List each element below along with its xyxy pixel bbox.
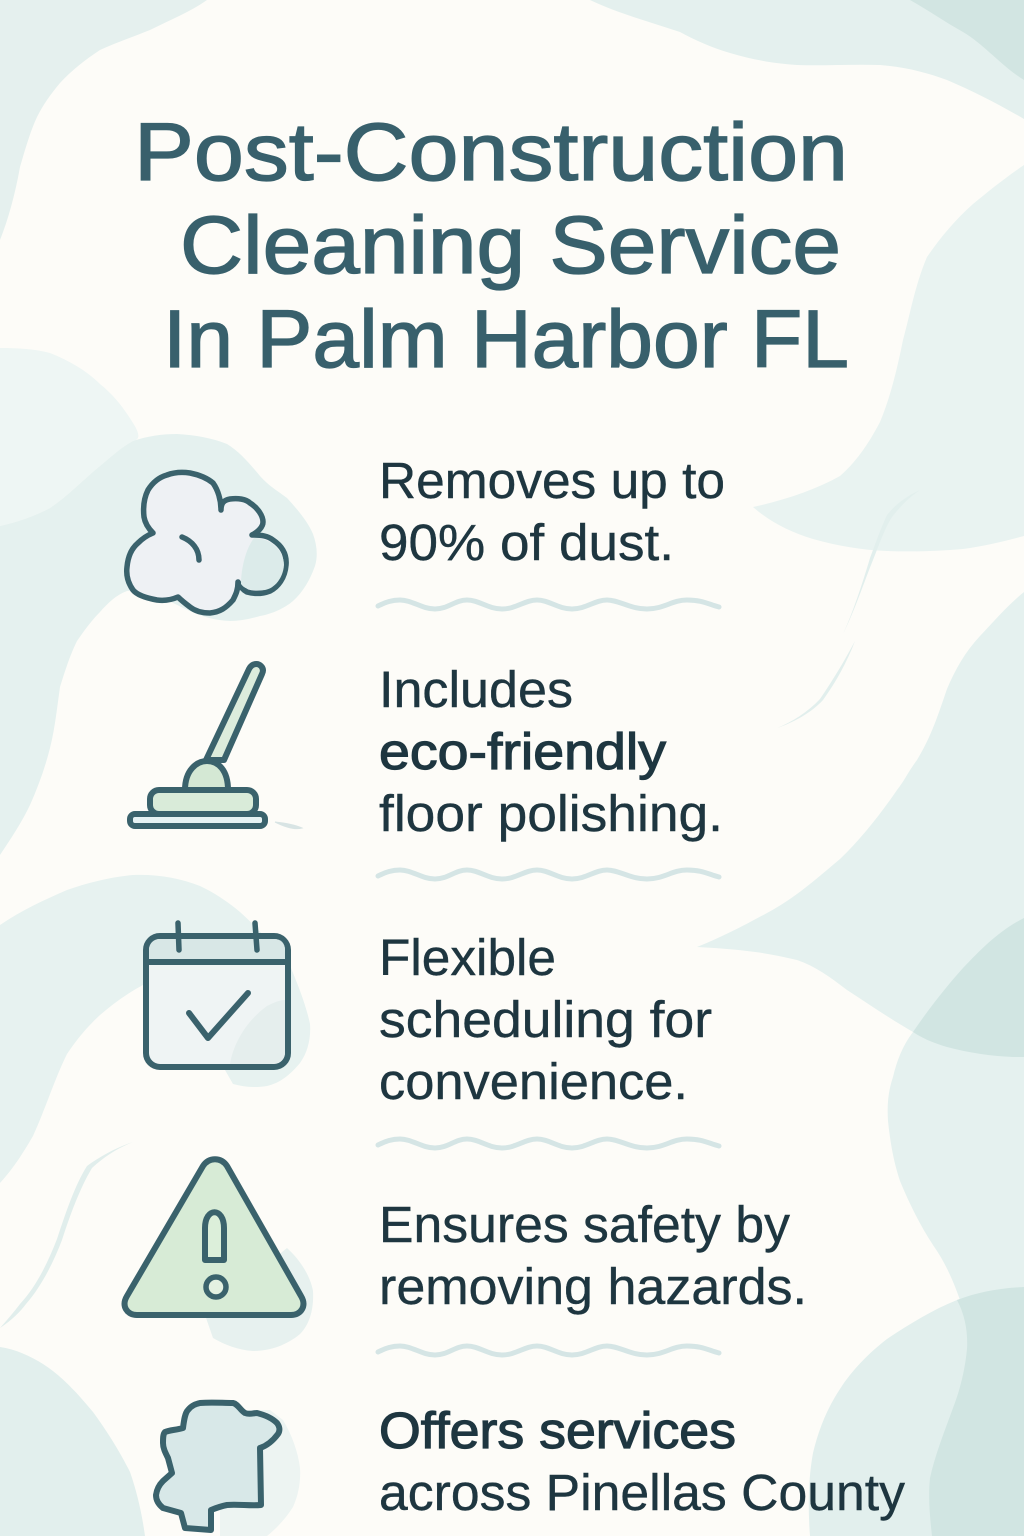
text: scheduling: scheduling for bbox=[379, 991, 712, 1048]
text: safety: removing hazards. bbox=[379, 1258, 807, 1315]
wave dividers bbox=[378, 600, 719, 1355]
text: scheduling: Flexible bbox=[379, 929, 556, 986]
text: service area bbox=[379, 1402, 905, 1521]
text: safety: Ensures safety by bbox=[379, 1196, 790, 1253]
title bbox=[134, 107, 849, 385]
icon: floor polisher mop bbox=[130, 664, 265, 826]
text: scheduling bbox=[379, 929, 712, 1110]
icon: calendar with check bbox=[146, 923, 288, 1067]
text: floor polishing bbox=[379, 661, 723, 842]
text: dust removal: Removes up to bbox=[379, 452, 725, 509]
text: dust removal bbox=[379, 452, 725, 571]
text: safety bbox=[379, 1196, 807, 1315]
title: Cleaning Service bbox=[180, 200, 841, 291]
text: dust removal: 90% of dust. bbox=[379, 514, 674, 571]
title: In Palm Harbor FL bbox=[163, 294, 849, 385]
text: service area: across Pinellas County bbox=[379, 1464, 905, 1521]
icon: Pinellas County map bbox=[156, 1403, 279, 1530]
text: floor polishing: floor polishing. bbox=[379, 785, 723, 842]
text: floor polishing: eco-friendly bbox=[379, 723, 667, 780]
icon: dust cloud bbox=[127, 472, 286, 613]
text: service area: Offers services bbox=[379, 1402, 736, 1459]
icon: warning triangle bbox=[125, 1159, 303, 1315]
text: scheduling: convenience. bbox=[379, 1053, 688, 1110]
text: floor polishing: Includes bbox=[379, 661, 573, 718]
title: Post-Construction bbox=[134, 107, 848, 198]
